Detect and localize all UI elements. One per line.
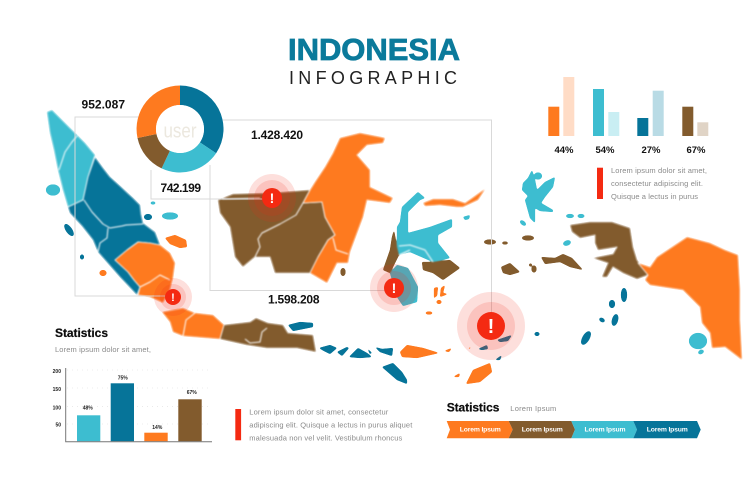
region: Java (162, 308, 316, 352)
connector lines (75, 117, 492, 326)
alert marker: Sulawesi (370, 264, 418, 312)
alert marker: Lesser Sunda (457, 292, 525, 360)
value labels: 952.087 (82, 98, 125, 112)
paired bar chart: 44% (554, 145, 574, 156)
callout text: top right (597, 166, 707, 201)
region: Maluku (484, 170, 627, 346)
paired bar chart (548, 77, 708, 156)
value labels: 742.199 (160, 181, 201, 195)
paired bar chart: 27% (641, 145, 661, 156)
callout text: bottom center (235, 407, 413, 442)
bar chart: 200 (53, 369, 61, 375)
alert marker: Lesser Sunda: ! (488, 316, 494, 338)
callout text: top right: Quisque a lectus in purus (611, 192, 698, 201)
map of Indonesia (46, 110, 742, 384)
bar chart: 50 (55, 422, 61, 428)
region: Papua (570, 222, 742, 360)
alert marker: Sumatra (154, 278, 192, 316)
step: orange: Lorem Ipsum (460, 427, 501, 434)
title (288, 32, 460, 88)
callout text: bottom center: malesuada non vel velit. Vestibulum rhoncus (249, 433, 403, 442)
bar chart: 67% (187, 390, 197, 396)
title: INDONESIA (288, 32, 460, 67)
step: orange (447, 421, 513, 438)
bar chart: 48% (83, 406, 93, 412)
value labels: 1.428.420 (251, 128, 303, 142)
bar chart (53, 368, 212, 442)
paired bar chart: 54% (595, 145, 615, 156)
statistics heading (55, 326, 151, 354)
region: Sulawesi (383, 188, 486, 314)
step: blue: Lorem Ipsum (647, 427, 688, 434)
arrow steps (447, 421, 701, 438)
callout text: top right: consectetur adipiscing elit. (611, 179, 703, 188)
region: Sumatra islands (46, 184, 187, 276)
statistics progress heading (447, 400, 556, 414)
alert marker: Kalimantan: ! (270, 190, 274, 206)
step: teal (571, 421, 637, 438)
statistics heading: Lorem ipsum dolor sit amet, (55, 345, 151, 354)
callout text: bottom center: Lorem ipsum dolor sit amet, consectetur (249, 407, 389, 416)
bar chart: 150 (53, 387, 61, 393)
alert marker: Sulawesi: ! (392, 280, 396, 296)
paired bar chart: 67% (686, 145, 706, 156)
region: Sumatra (47, 110, 175, 303)
statistics heading: Statistics (55, 326, 108, 340)
bar chart: 14% (152, 425, 163, 431)
value labels (82, 98, 320, 306)
alert marker: Kalimantan (248, 174, 296, 222)
statistics progress heading: Statistics (447, 400, 500, 414)
step: teal: Lorem Ipsum (584, 427, 626, 434)
callout text: bottom center: adipiscing elit. Quisque a lectus in purus aliquet (249, 420, 413, 429)
donut chart (137, 85, 224, 172)
step: blue (633, 421, 701, 438)
callout text: top right: Lorem ipsum dolor sit amet, (611, 166, 707, 175)
step: brown (509, 421, 575, 438)
step: brown: Lorem Ipsum (522, 427, 563, 434)
bar chart: 100 (53, 406, 61, 412)
title: INFOGRAPHIC (289, 68, 457, 88)
statistics progress heading: Lorem Ipsum (510, 404, 556, 413)
value labels: 1.598.208 (268, 292, 320, 306)
region: Lesser Sunda Islands (319, 335, 512, 384)
donut chart: user (164, 120, 197, 142)
bar chart: 75% (118, 376, 128, 382)
alert marker: Sumatra: ! (171, 292, 175, 304)
region: Kalimantan (218, 133, 393, 283)
